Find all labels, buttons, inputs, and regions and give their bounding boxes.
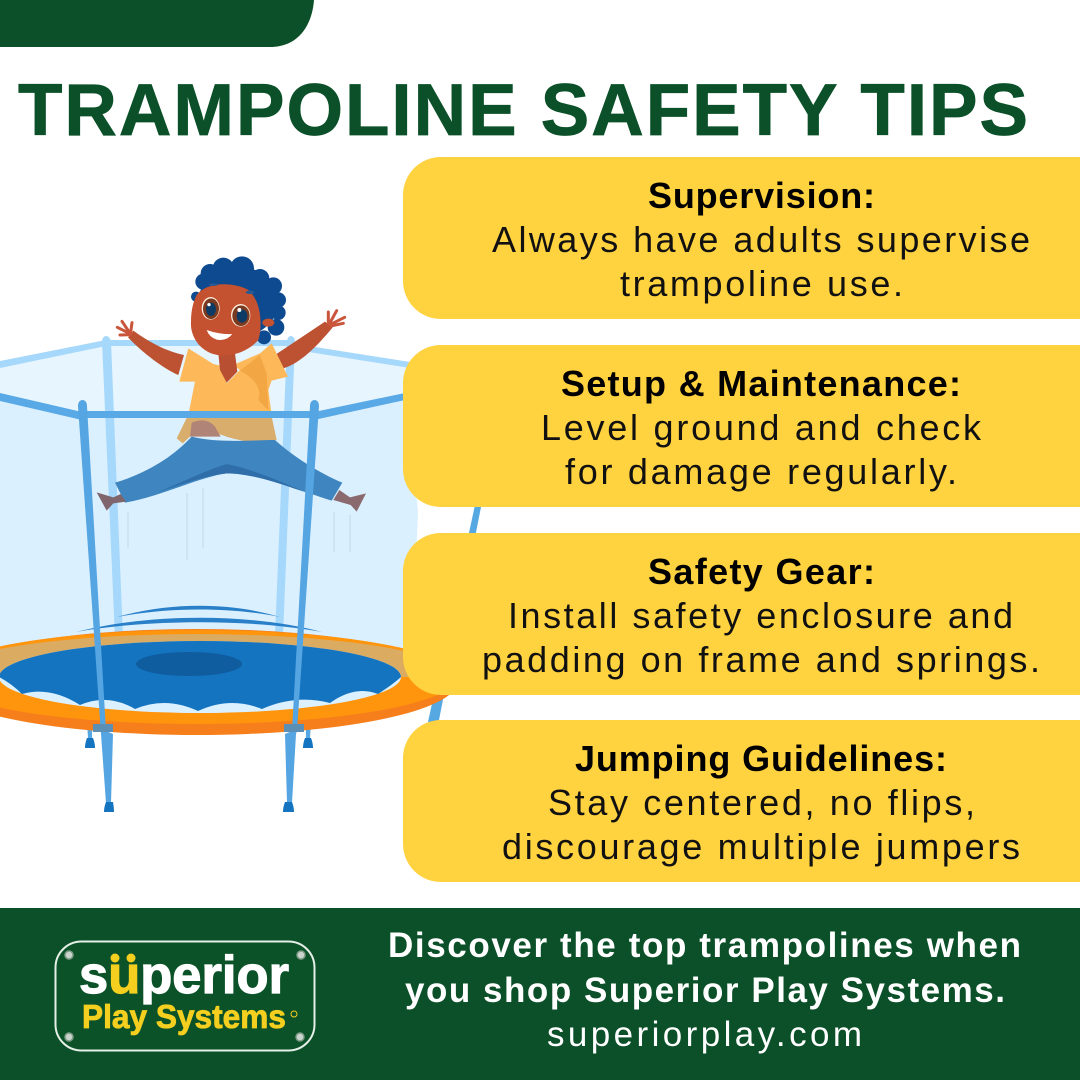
card background bbox=[403, 720, 1080, 882]
front rails bbox=[0, 393, 405, 420]
inner gap bbox=[0, 641, 401, 713]
website: superiorplay.com bbox=[547, 1015, 862, 1054]
neck bbox=[218, 353, 237, 383]
card text line 2: for damage regularly. bbox=[565, 451, 957, 492]
motion arcs bbox=[76, 606, 322, 632]
ring outer shade bbox=[0, 629, 457, 735]
card text line 2: padding on frame and springs. bbox=[482, 639, 1040, 680]
pants shadow bbox=[157, 464, 307, 493]
card heading: Setup & Maintenance: bbox=[561, 363, 961, 404]
trampoline frame legs behind ring bbox=[85, 690, 313, 738]
shirt bbox=[179, 343, 288, 415]
illustration: child jumping on trampoline bbox=[0, 256, 481, 812]
card heading: Supervision: bbox=[648, 175, 875, 216]
back poles and upper rails bbox=[0, 336, 410, 638]
safety net lower bbox=[0, 396, 418, 680]
panel: safety gear bbox=[403, 533, 1080, 695]
logo outline bbox=[56, 942, 314, 1050]
logo screws bbox=[65, 951, 305, 1041]
logo bbox=[56, 942, 314, 1050]
logo wordmark: play systems: Play Systems bbox=[82, 998, 286, 1035]
logo smile dots bbox=[110, 954, 136, 962]
call to action line 1: Discover the top trampolines when bbox=[388, 926, 1021, 965]
front feet bbox=[104, 802, 294, 812]
trampoline ring bbox=[0, 629, 457, 735]
footer band bbox=[0, 908, 1080, 1080]
child bbox=[97, 256, 366, 512]
rear feet bbox=[85, 738, 313, 748]
right eye bbox=[231, 304, 250, 327]
card background bbox=[403, 345, 1080, 507]
belly bbox=[190, 420, 221, 437]
safety net upper bbox=[0, 342, 408, 415]
right arm bbox=[275, 322, 333, 368]
pants bbox=[115, 437, 342, 503]
left hand bbox=[117, 321, 132, 335]
card background bbox=[403, 533, 1080, 695]
left foot bbox=[97, 492, 126, 511]
ear bbox=[262, 319, 274, 327]
mat shadow bbox=[136, 652, 242, 676]
card text line 1: Install safety enclosure and bbox=[508, 595, 1013, 636]
pole clamps bbox=[93, 724, 304, 732]
eyebrows bbox=[209, 283, 254, 294]
card heading: Safety Gear: bbox=[648, 551, 875, 592]
card text line 2: trampoline use. bbox=[620, 263, 903, 304]
card text line 1: Level ground and check bbox=[541, 407, 982, 448]
title: TRAMPOLINE SAFETY TIPS bbox=[18, 70, 1030, 151]
decorative top tab bbox=[0, 0, 314, 47]
shirt shading bbox=[240, 355, 268, 411]
card background bbox=[403, 157, 1080, 319]
card text line 1: Always have adults supervise bbox=[492, 219, 1030, 260]
right hand bbox=[328, 311, 345, 326]
footer background bbox=[0, 908, 1080, 1080]
ring tan back bbox=[0, 634, 457, 677]
logo wordmark: superior: superior bbox=[79, 946, 289, 1005]
lower shirt through net bbox=[177, 417, 277, 443]
card text line 1: Stay centered, no flips, bbox=[548, 782, 975, 823]
front left pole bbox=[78, 400, 113, 803]
panel: jumping guidelines bbox=[403, 720, 1080, 882]
card heading: Jumping Guidelines: bbox=[575, 738, 947, 779]
logo registered mark bbox=[291, 1011, 297, 1017]
front right pole bbox=[285, 400, 319, 803]
jumping mat bbox=[0, 641, 401, 711]
call to action line 2: you shop Superior Play Systems. bbox=[405, 971, 1005, 1010]
panel: supervision bbox=[403, 157, 1080, 319]
face bbox=[191, 284, 261, 356]
back right leg bbox=[428, 505, 481, 725]
left arm bbox=[128, 331, 184, 375]
ring orange bbox=[0, 630, 457, 724]
card text line 2: discourage multiple jumpers bbox=[502, 826, 1020, 867]
hair bbox=[191, 256, 286, 344]
left eye bbox=[202, 297, 220, 320]
mouth bbox=[207, 330, 232, 340]
eyes bbox=[202, 297, 250, 327]
motion lines bbox=[128, 488, 350, 560]
panel: setup and maintenance bbox=[403, 345, 1080, 507]
right foot bbox=[333, 490, 366, 512]
